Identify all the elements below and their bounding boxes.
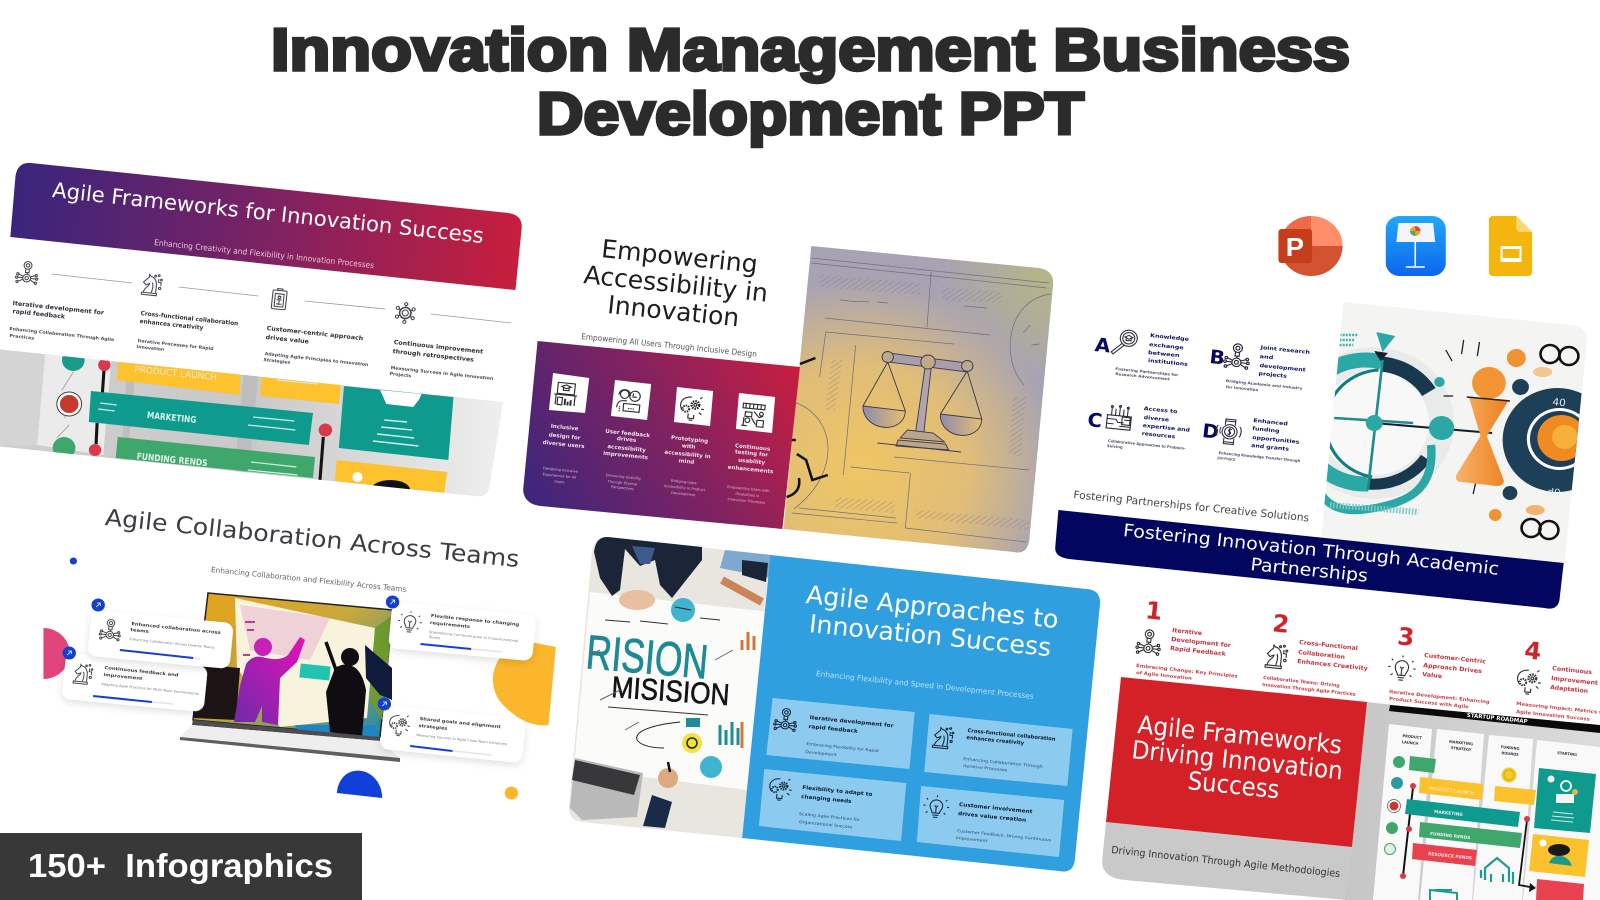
step 2: Innovation Through Agile Practices	[1262, 682, 1356, 698]
partnership B: Bridging Academia and Industry	[1226, 378, 1303, 391]
column 2: Cross-functional collaboration	[140, 310, 239, 327]
step 1: Development for	[1171, 637, 1231, 649]
partnership A: institutions	[1148, 358, 1188, 368]
feature text 1: Users	[554, 480, 565, 485]
column 3: Strategies	[263, 357, 291, 366]
abstract illustration	[1322, 302, 1587, 570]
roadmap column labels: MARKETING	[1449, 740, 1473, 746]
icon card 4	[736, 393, 775, 433]
icon: PowerPoint	[1278, 216, 1343, 276]
step 4: 4	[1523, 636, 1543, 666]
icon card 2	[611, 380, 651, 420]
feature text 2: accessibility	[607, 444, 646, 454]
feature text 2: improvements	[603, 451, 648, 461]
card: iterative development: Iterative development for	[809, 715, 894, 729]
card: flexible response: Teams	[428, 635, 441, 640]
slide title	[805, 581, 1060, 663]
partnership A: exchange	[1149, 342, 1184, 351]
card: customer involvement: Improvement	[956, 835, 988, 843]
slide subtitle: Empowering All Users Through Inclusive Design	[581, 331, 757, 359]
column 3: Customer-centric approach	[266, 325, 364, 342]
card: cross-functional collaboration	[924, 714, 1073, 786]
step 1: Embracing Change: Key Principles	[1136, 663, 1238, 680]
feature text 2: Perspectives	[611, 485, 634, 491]
abstract illustration: 40	[1552, 396, 1566, 409]
column 4: Measuring Success in Agile Innovation	[390, 365, 494, 382]
roadmap image strip	[0, 350, 503, 496]
mission vision photo	[569, 537, 772, 838]
startup roadmap image: STARTUP ROADMAP	[1466, 713, 1528, 725]
feature text 1: diverse users	[542, 440, 585, 450]
partnership B: projects	[1258, 371, 1287, 380]
mission vision photo: RISION	[584, 626, 710, 690]
step 1: of Agile Innovation	[1136, 670, 1192, 682]
partnership B: Joint research	[1259, 345, 1310, 356]
slide title: Agile Frameworks for Innovation Success	[51, 178, 485, 249]
partnership B	[1208, 343, 1310, 392]
feature text 3: Prototyping	[671, 435, 708, 445]
main title: Innovation Management Business	[271, 17, 1350, 83]
feature text 2: Enhancing Usability	[605, 473, 641, 481]
header band	[10, 163, 522, 290]
badge: 150+ Infographics: 150+ Infographics	[28, 847, 333, 884]
slide subtitle: Enhancing Collaboration and Flexibility Across Teams	[211, 565, 407, 594]
column 2: Innovation	[136, 344, 165, 353]
navy title bar: Partnerships	[1249, 555, 1369, 587]
partnership D: funding	[1252, 426, 1280, 435]
step 2	[1262, 609, 1368, 698]
column 1: Practices	[9, 333, 35, 342]
panel: slide Agile Collaboration Across Teams	[43, 503, 556, 800]
partnership A	[1094, 329, 1190, 381]
step 4: Improvement	[1551, 676, 1598, 687]
card: flexibility to adapt: Scaling Agile Practices for	[799, 811, 860, 822]
partnership C: resources	[1141, 431, 1176, 440]
main title	[271, 17, 1350, 147]
card: shared goals: strategies	[418, 723, 448, 732]
step 4: Continuous	[1552, 666, 1593, 676]
partnership B: development	[1259, 363, 1306, 374]
partnership C: Collaborative Approaches to Problem-	[1108, 438, 1186, 451]
column 1: Enhancing Collaboration Through Agile	[9, 326, 114, 343]
card: flexible response: Flexible response to changing	[431, 613, 520, 628]
feature text 2: Through Diverse	[606, 479, 637, 486]
startup roadmap image: MARKETING	[1434, 809, 1464, 818]
feature text 4	[727, 443, 774, 505]
feature text 4: usability	[738, 458, 766, 466]
partnership A: between	[1148, 350, 1180, 359]
partnership D	[1201, 418, 1301, 463]
column 2: Iterative Processes for Rapid	[137, 338, 214, 352]
red title panel: Success	[1186, 766, 1281, 804]
column 3: Adapting Agile Principles to Innovation	[264, 351, 369, 368]
gradient feature panel	[523, 341, 800, 529]
column 2	[136, 273, 258, 353]
card: flexible response: requirements	[430, 620, 471, 630]
column 4	[389, 302, 511, 382]
gray base	[1102, 822, 1352, 900]
step 4: Agile Innovation Success	[1516, 709, 1590, 723]
mission vision photo: MISISION	[611, 671, 731, 712]
card: flexibility to adapt: Organizational Success	[799, 819, 853, 829]
column 4: through retrospectives	[392, 348, 475, 364]
startup roadmap image: RESOURCE FUNDS	[1428, 851, 1472, 862]
step 4: Adaptation	[1550, 685, 1588, 695]
step 1: 1	[1144, 596, 1164, 626]
slide title: Empowering	[600, 234, 759, 279]
step 1: Rapid Feedback	[1170, 646, 1227, 658]
card: customer involvement: Customer Feedback: Driving Continuous	[957, 828, 1051, 842]
column 2: enhances creativity	[139, 318, 204, 332]
slide title: Accessibility in	[582, 260, 769, 308]
slide title	[582, 234, 769, 332]
feature text 4: Continuous	[735, 443, 770, 453]
feature text 1	[542, 424, 585, 485]
slide subtitle: Fostering Partnerships for Creative Solutions	[1073, 488, 1310, 524]
card: enhanced collaboration: teams	[130, 627, 150, 635]
red title panel	[1106, 677, 1367, 847]
panel: slide Agile Frameworks for Innovation Success	[0, 163, 522, 505]
slide title: Agile Approaches to	[805, 581, 1060, 635]
step 2: Enhances Creativity	[1297, 659, 1368, 672]
roadmap column labels: PRODUCT	[1402, 734, 1423, 740]
feature text 2	[603, 429, 651, 491]
feature text 3: Accessibility in Product	[664, 484, 706, 492]
card: cross-functional collaboration: Iterative Processes	[963, 763, 1008, 772]
card: cross-functional collaboration: enhances creativity	[966, 735, 1025, 747]
card: customer involvement	[917, 786, 1064, 857]
partnership B: and	[1259, 354, 1274, 361]
partnership A: A	[1094, 334, 1112, 357]
roadmap column labels: ROUNDS	[1501, 751, 1519, 757]
blue content panel	[742, 555, 1100, 872]
icon: Keynote	[1386, 216, 1446, 276]
icon: wheelchair fragments	[787, 358, 828, 497]
card: shared goals	[380, 705, 526, 763]
feature text 1: Designing Inclusive	[543, 466, 578, 474]
laptop	[180, 593, 400, 762]
partnership D: Enhanced	[1253, 418, 1288, 427]
feature text 4: Empowering Users with	[727, 485, 770, 493]
card: iterative development: rapid feedback	[808, 724, 859, 735]
step 1	[1135, 596, 1238, 682]
icon: balance scale	[863, 352, 982, 452]
panel: slide Agile Frameworks Driving Innovation Success	[1102, 596, 1600, 900]
card: flexibility to adapt	[759, 769, 906, 841]
step 3: Product Success with Agile	[1389, 696, 1469, 710]
panel: slide Empowering Accessibility in Innovation	[523, 234, 1053, 552]
panel: slide Fostering Innovation Through Academic Partnerships	[1055, 216, 1600, 609]
slide subtitle: Enhancing Flexibility and Speed in Development Processes	[816, 669, 1034, 701]
card: enhanced collaboration: Enhancing Collaboration Across Diverse Teams	[129, 637, 215, 650]
feature text 3: Bridging Gaps:	[671, 479, 698, 485]
icon card 3	[674, 387, 713, 426]
step 3: Iterative Development: Enhancing	[1389, 689, 1490, 706]
partnership D: D	[1201, 420, 1220, 443]
roadmap column labels: FUNDING	[1501, 745, 1520, 751]
feature text 1: Inclusive	[550, 424, 579, 432]
slide title: Innovation Success	[808, 610, 1053, 663]
startup roadmap image: FUNDING RENDS	[1430, 831, 1471, 841]
slide subtitle: Enhancing Creativity and Flexibility in Innovation Processes	[154, 237, 375, 270]
partnership B: for Innovation	[1226, 384, 1259, 392]
card: continuous feedback: Adapting Agile Practices for Multi-Team Environments	[101, 682, 200, 696]
partnership C: Solving	[1107, 443, 1123, 450]
column 1: rapid feedback	[12, 308, 66, 321]
card: enhanced collaboration: Enhanced collaboration across	[131, 621, 221, 636]
card: continuous feedback: Continuous feedback and	[104, 665, 179, 678]
roadmap image strip: FUNDING RENDS	[136, 452, 208, 469]
step 2: Collaboration	[1298, 650, 1345, 661]
column 4: Continuous improvement	[393, 339, 484, 356]
column 1	[9, 260, 132, 343]
card: shared goals: Measuring Success in Agile Cross-Team Initiatives	[416, 733, 507, 746]
partnership D: Joint Projects	[1217, 455, 1236, 462]
roadmap image strip: MARKETING	[146, 411, 197, 426]
feature text 3: mind	[678, 458, 695, 466]
step 1: Iterative	[1172, 628, 1202, 637]
partnership B: B	[1208, 346, 1226, 369]
card: flexibility to adapt: Flexibility to adapt to	[802, 785, 873, 798]
column 3	[263, 288, 385, 368]
step 2: 2	[1271, 609, 1291, 639]
card: continuous feedback: improvement	[103, 672, 144, 682]
partnership C	[1086, 404, 1190, 451]
card: flexible response: Streamlining Communication in Cross-Functional	[429, 630, 519, 643]
feature text 3	[664, 435, 711, 497]
feature text 1: design for	[548, 432, 581, 442]
partnership D: Enhancing Knowledge Transfer through	[1218, 450, 1301, 463]
card: continuous feedback	[62, 653, 208, 712]
column 3: drives value	[265, 334, 309, 346]
icon card 1	[549, 373, 589, 413]
feature text 2: drives	[617, 436, 636, 444]
red title panel: Driving Innovation	[1130, 735, 1344, 785]
card: iterative development: Embracing Flexibility for Rapid	[806, 741, 879, 753]
partnership D: and grants	[1251, 443, 1289, 453]
startup roadmap image: PRODUCT LAUNCH	[1429, 786, 1475, 797]
slide title: Agile Collaboration Across Teams	[104, 503, 521, 573]
navy title bar	[1055, 510, 1564, 609]
roadmap image strip: PRODUCT LAUNCH	[134, 365, 217, 383]
main title: Development PPT	[537, 81, 1084, 147]
icon: Google Slides	[1489, 216, 1532, 276]
badge: 150+ Infographics	[0, 833, 362, 900]
step 3: Approach Drives	[1423, 663, 1483, 675]
partnership C: C	[1086, 409, 1103, 432]
step 2: Collaborative Teams: Driving	[1263, 675, 1340, 689]
slide title: Innovation	[606, 290, 741, 332]
feature text 4: Innovation Processes	[727, 497, 766, 505]
roadmap column labels: STRATEGY	[1451, 746, 1472, 752]
feature text 1: Experiences for All	[542, 472, 576, 480]
roadmap column labels: LAUNCH	[1402, 740, 1419, 746]
roadmap column labels: STARTING	[1557, 751, 1577, 757]
card: cross-functional collaboration: Enhancing Collaboration Through	[963, 756, 1044, 769]
card: enhanced collaboration	[87, 610, 234, 669]
abstract illustration: d0	[1547, 486, 1561, 499]
feature text 4: Disabilities in	[735, 492, 760, 498]
partnership D: opportunities	[1252, 435, 1300, 446]
feature text 3: accessibility in	[664, 450, 711, 460]
feature text 3: Development	[671, 491, 696, 497]
icon: PowerPoint: P	[1286, 233, 1304, 262]
card: customer involvement: drives value creation	[958, 811, 1027, 824]
feature text 2: User feedback	[605, 429, 651, 439]
navy title bar: Fostering Innovation Through Academic	[1122, 521, 1500, 580]
column 4: Projects	[389, 371, 412, 379]
feature text 4: testing for	[735, 449, 769, 459]
card: flexibility to adapt: changing needs	[801, 794, 852, 805]
slide subtitle: Driving Innovation Through Agile Methodologies	[1111, 845, 1341, 880]
step 3	[1387, 622, 1490, 710]
startup roadmap image	[1345, 702, 1600, 900]
partnership A: Fostering Partnerships for	[1115, 366, 1179, 377]
step 3: 3	[1396, 622, 1416, 652]
red title panel: Agile Frameworks	[1136, 710, 1343, 760]
feature text 4: enhancements	[727, 465, 774, 475]
partnership C: diverse	[1143, 415, 1170, 423]
step 4	[1516, 636, 1600, 723]
step 2: Cross-Functional	[1299, 640, 1358, 652]
step 4: Measuring Impact: Metrics for	[1516, 701, 1600, 717]
format icons	[1278, 216, 1532, 276]
feature text 3: with	[681, 443, 696, 451]
roadmap column labels	[1402, 734, 1577, 757]
card: iterative development: Development	[805, 749, 838, 757]
decorative shapes	[43, 558, 556, 800]
card: cross-functional collaboration: Cross-functional collaboration	[967, 728, 1056, 743]
scales illustration panel	[783, 246, 1053, 552]
card: customer involvement: Customer involvement	[959, 802, 1033, 815]
step 3: Value	[1422, 672, 1442, 680]
card: flexible response	[388, 602, 537, 661]
partnership C: Access to	[1143, 406, 1178, 415]
column 1: Iterative development for	[12, 300, 104, 317]
panel: slide Agile Approaches to Innovation Success	[569, 537, 1100, 872]
step 3: Customer-Centric	[1424, 653, 1487, 666]
arrow badges	[63, 596, 399, 710]
partnership A: Knowledge	[1150, 333, 1190, 343]
card: iterative development	[766, 698, 915, 769]
partnership C: expertise and	[1142, 423, 1190, 434]
card: shared goals: Shared goals and alignment	[419, 716, 502, 730]
partnership A: Research Advancement	[1115, 371, 1170, 381]
